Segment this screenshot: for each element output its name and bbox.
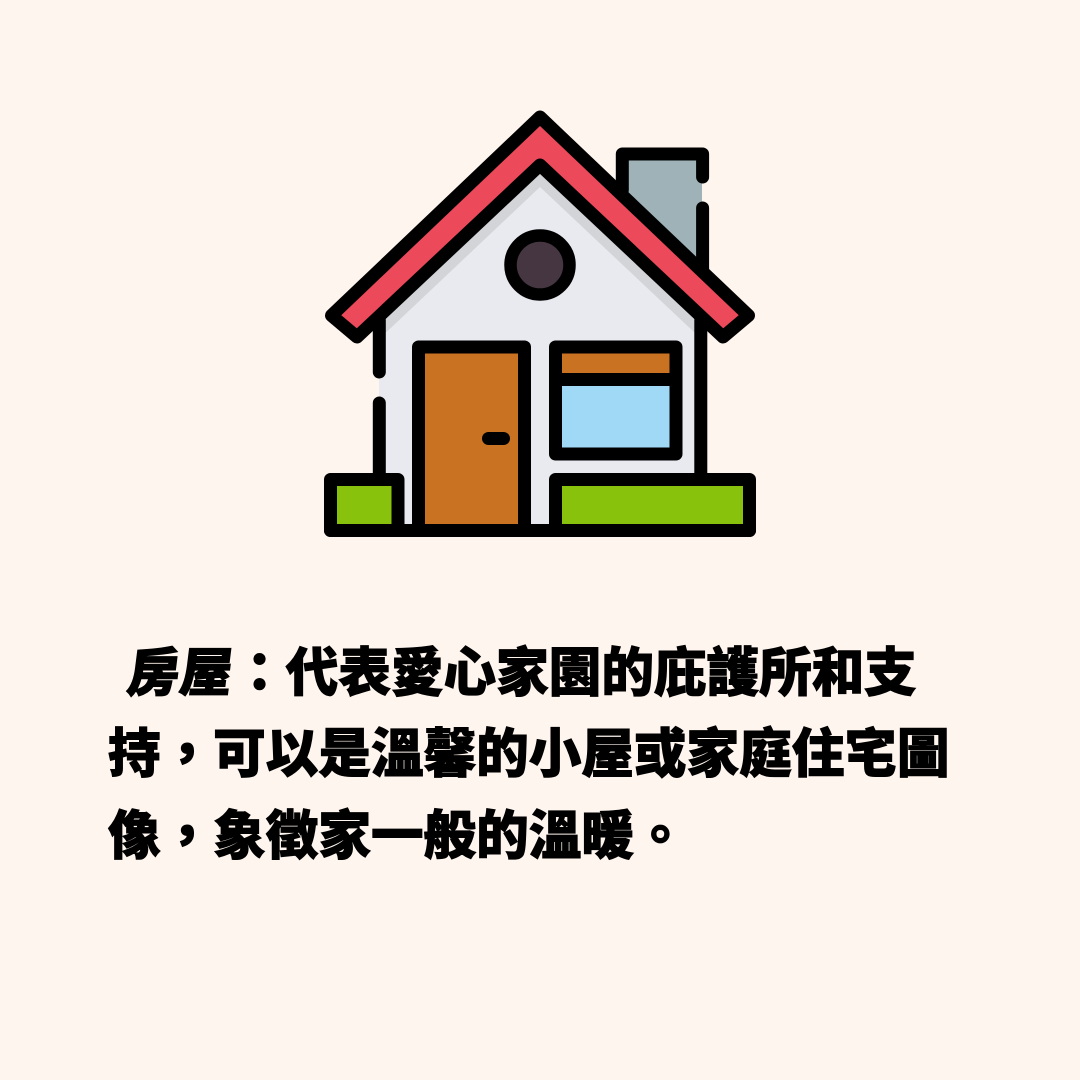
caption line 2: 持，可以是溫馨的小屋或家庭住宅圖 <box>108 712 950 788</box>
roof <box>332 117 748 337</box>
ground line <box>330 524 750 537</box>
chimney <box>622 154 703 270</box>
round attic window <box>510 236 570 294</box>
caption line 3: 像，象徵家一般的溫暖。 <box>108 794 687 870</box>
window <box>556 347 676 454</box>
right grass <box>556 480 750 530</box>
house wall <box>379 165 701 531</box>
caption line 1: 房屋 <box>123 631 238 707</box>
left grass <box>330 480 398 530</box>
door <box>418 347 524 530</box>
caption line 1: ：代表愛心家園的庇護所和支 <box>233 631 917 707</box>
